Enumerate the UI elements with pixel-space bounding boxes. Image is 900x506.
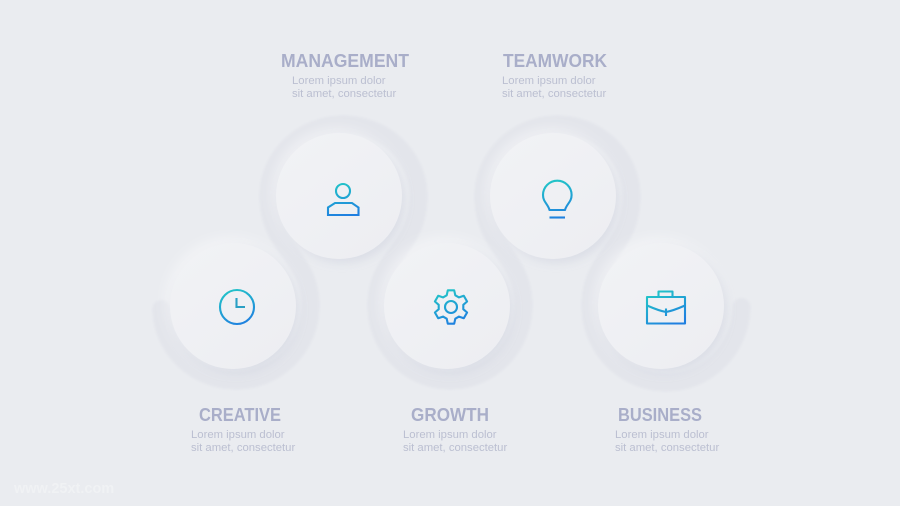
step: creative (170, 243, 296, 454)
disc: growth (384, 243, 510, 369)
step: teamwork (490, 51, 616, 259)
step: business (598, 243, 724, 454)
heading: creative: CREATIVE (199, 405, 281, 425)
step: management (276, 51, 409, 259)
text: growth: sit amet, consectetur (403, 442, 507, 454)
disc: teamwork (490, 133, 616, 259)
icon: clock (220, 290, 254, 324)
icon: light bulb (543, 181, 572, 218)
text: creative: sit amet, consectetur (191, 442, 295, 454)
disc: creative (170, 243, 296, 369)
step: growth (384, 243, 510, 454)
icon: briefcase (647, 292, 685, 324)
text: creative: Lorem ipsum dolor (191, 429, 285, 441)
heading: business: BUSINESS (618, 405, 702, 425)
text: management: Lorem ipsum dolor (292, 75, 386, 87)
heading: teamwork: TEAMWORK (503, 51, 607, 71)
text: teamwork: sit amet, consectetur (502, 88, 606, 100)
icon: person (328, 184, 358, 215)
text: growth: Lorem ipsum dolor (403, 429, 497, 441)
heading: management: MANAGEMENT (281, 51, 409, 71)
wavy ribbon track (162, 124, 742, 382)
heading: growth: GROWTH (411, 405, 489, 425)
disc: management (276, 133, 402, 259)
text: teamwork: Lorem ipsum dolor (502, 75, 596, 87)
disc: business (598, 243, 724, 369)
icon: gear (435, 290, 467, 324)
text: management: sit amet, consectetur (292, 88, 396, 100)
text: business: Lorem ipsum dolor (615, 429, 709, 441)
watermark: www.25xt.com (13, 481, 114, 497)
text: business: sit amet, consectetur (615, 442, 719, 454)
